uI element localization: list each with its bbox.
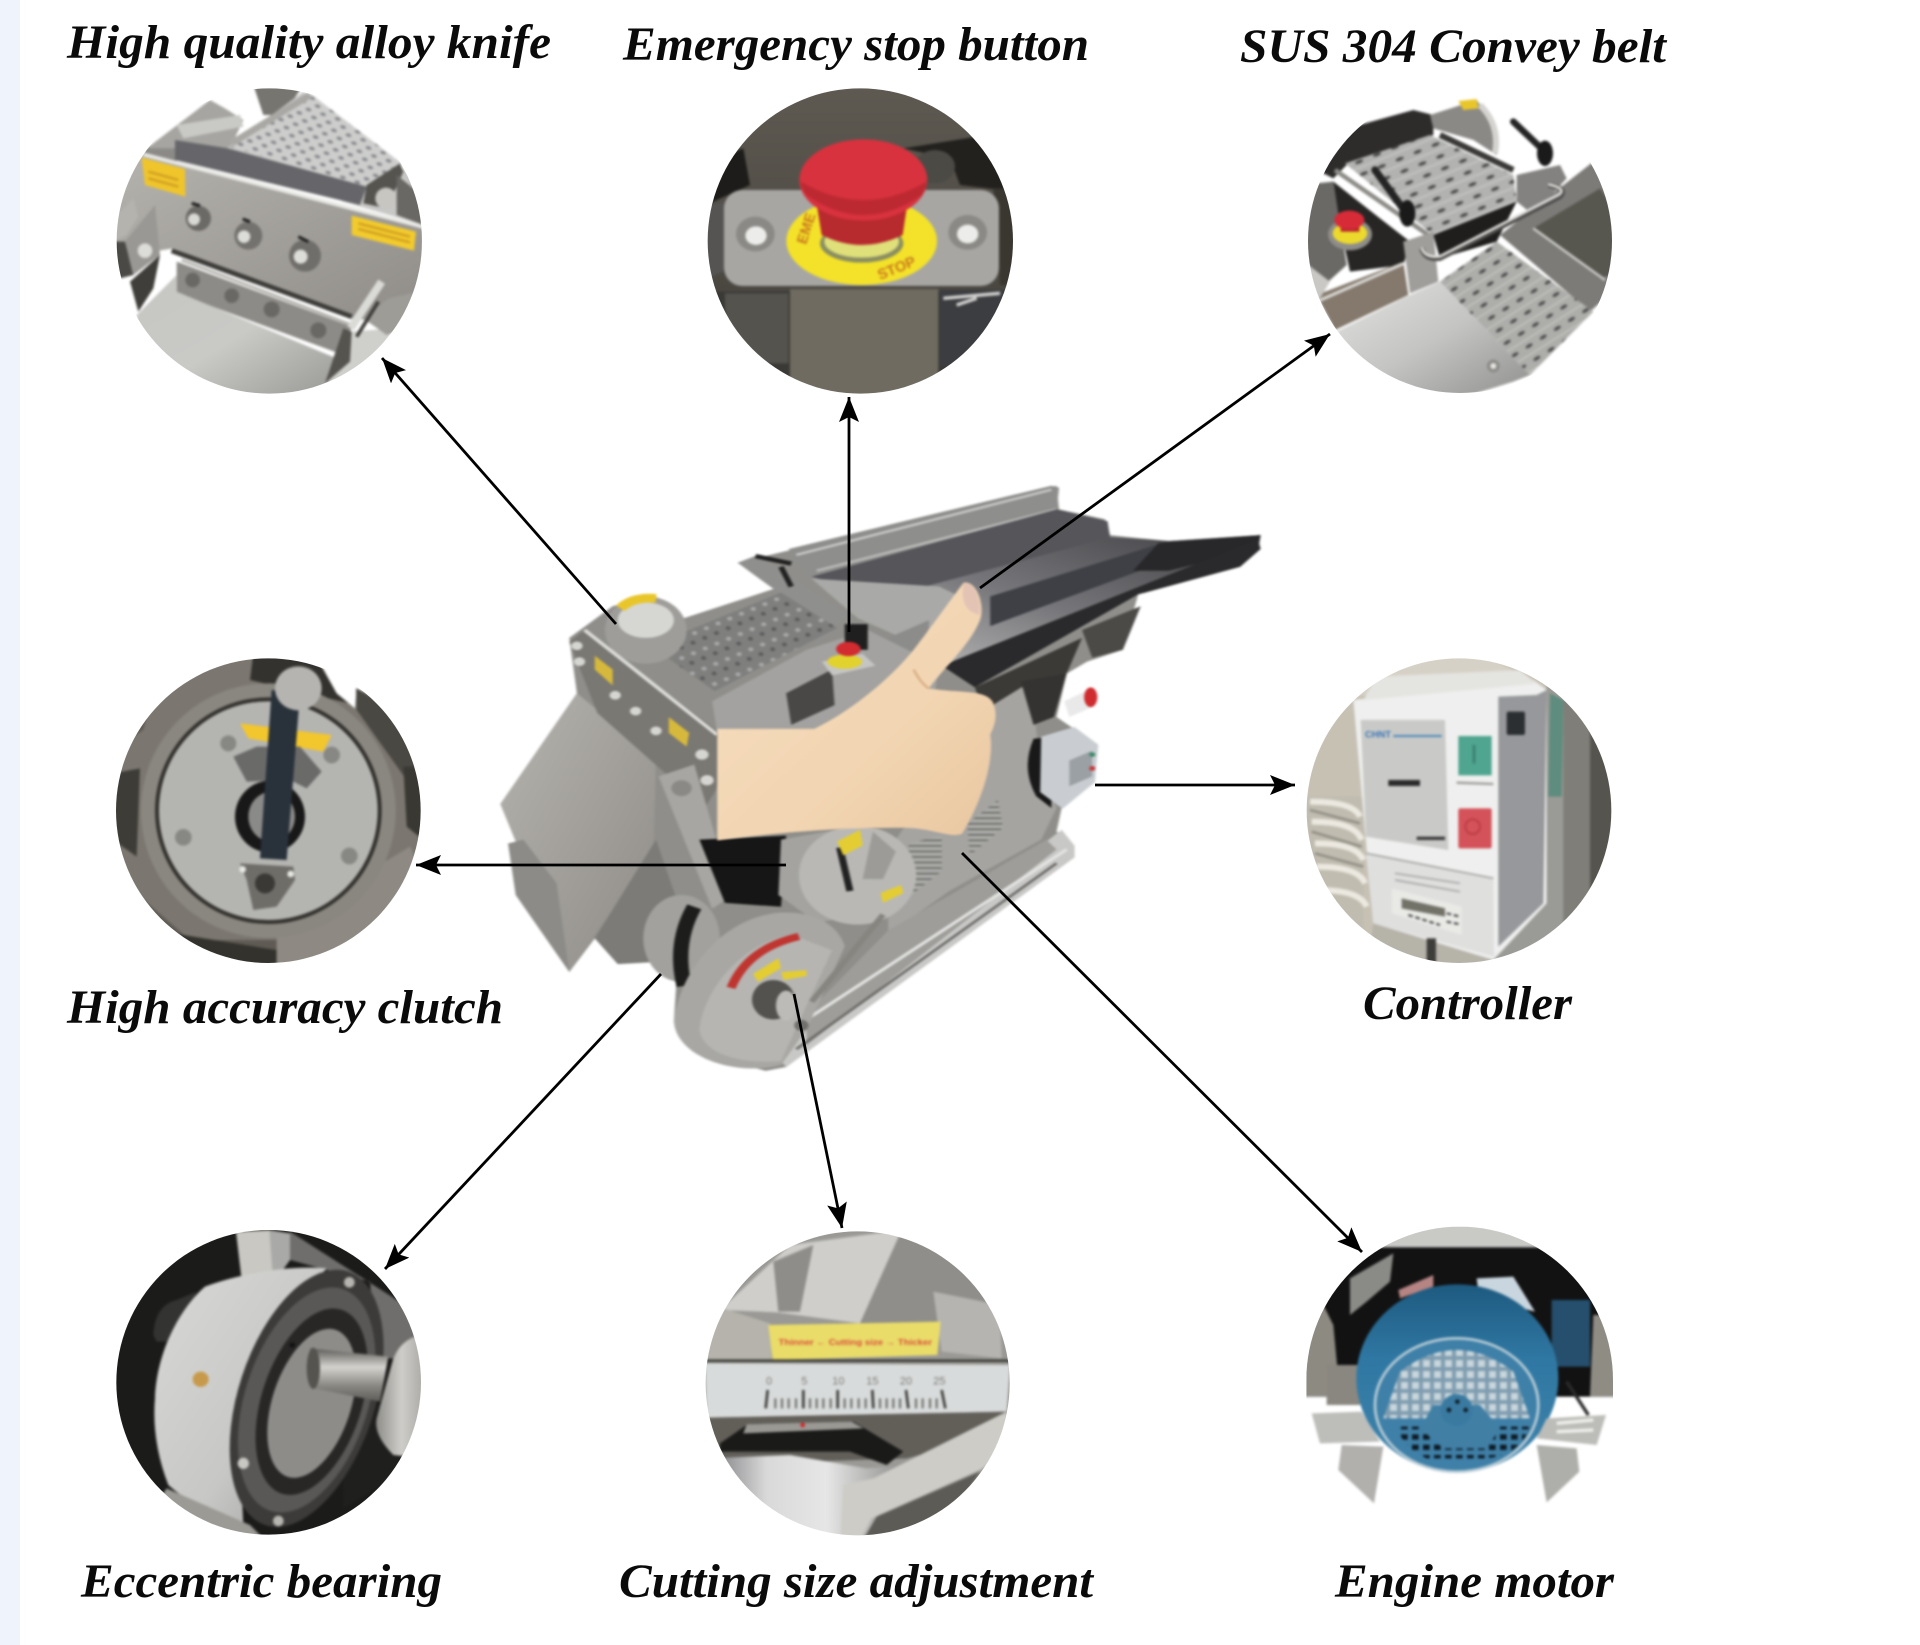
right tray xyxy=(1500,162,1620,312)
thumbs up hand xyxy=(717,582,996,840)
yellow warning labels xyxy=(142,158,185,197)
eccentric bearing drum xyxy=(643,895,720,982)
panel: conveyor belt photo circle xyxy=(1308,97,1612,393)
shaft collar xyxy=(376,1335,427,1458)
main body side xyxy=(888,681,1057,934)
arrow: to motor xyxy=(962,853,1362,1252)
dark gap xyxy=(1433,202,1517,258)
lower knife clamp and bolts xyxy=(177,262,352,355)
green start button xyxy=(1458,736,1492,775)
brass oil nipple xyxy=(193,1372,209,1387)
scale numbers: 15 xyxy=(866,1375,878,1387)
blue motor housing xyxy=(1356,1284,1558,1472)
steel side plate xyxy=(1498,690,1547,947)
panel: emergency stop photo circle xyxy=(700,85,1020,405)
angled lever arm xyxy=(840,1412,1012,1545)
center bearing xyxy=(235,781,305,853)
side link arm xyxy=(659,764,733,909)
plate screws xyxy=(736,217,775,251)
thumb nail xyxy=(963,583,980,615)
diagonal drive rod xyxy=(812,915,883,1002)
panel: cutting size scale photo circle xyxy=(700,1225,1020,1545)
arrow: to stop button xyxy=(848,397,850,632)
fan cover upper grid xyxy=(1383,1350,1530,1418)
feed belt xyxy=(651,592,837,691)
U shaped guard rod xyxy=(1422,185,1562,259)
scale numbers: 5 xyxy=(801,1375,807,1387)
button stem and silver ring xyxy=(818,234,905,264)
rating plate xyxy=(1477,1277,1535,1312)
lower outfeed tray xyxy=(888,535,1261,666)
scale numbers: 25 xyxy=(933,1375,945,1387)
scale numbers: 20 xyxy=(900,1375,912,1387)
arrow: to knife xyxy=(382,358,616,624)
knife side plate with bolts xyxy=(569,630,720,808)
output shaft xyxy=(310,1348,388,1402)
fan cover xyxy=(1375,1338,1538,1472)
silver drum xyxy=(154,1268,327,1525)
title: Eccentric bearing: Eccentric bearing xyxy=(80,1555,442,1608)
lower bracket xyxy=(716,292,942,372)
cutter housing xyxy=(712,630,939,733)
side vents xyxy=(1307,797,1363,953)
black handles xyxy=(1375,170,1410,218)
emergency stop on machine xyxy=(822,654,875,675)
yellow labels on pulley xyxy=(753,958,781,982)
left mounting bracket xyxy=(1312,1412,1380,1443)
large pulley guard xyxy=(674,913,845,1068)
arrow: to bearing xyxy=(385,974,661,1269)
adjusting bolts xyxy=(186,206,211,231)
base plate xyxy=(773,830,1074,1067)
gauge housing xyxy=(1430,100,1497,155)
lower dark frame xyxy=(707,1412,1010,1465)
title: Emergency stop button: Emergency stop button xyxy=(622,18,1089,71)
power plug xyxy=(1064,689,1097,717)
clutch drum xyxy=(778,830,909,923)
scale numbers: 10 xyxy=(832,1375,844,1387)
adjusting hub xyxy=(752,980,795,1019)
gauge drum xyxy=(605,596,687,664)
fan cover lower grid xyxy=(1397,1427,1530,1458)
aluminium face disk xyxy=(159,701,378,920)
yellow direction label xyxy=(768,1322,941,1360)
arrow: to cutting size xyxy=(794,994,842,1228)
panel: emergency stop photo circle: EME xyxy=(795,211,820,246)
red mushroom button xyxy=(799,139,927,221)
lever arm xyxy=(260,690,300,860)
side bracket xyxy=(125,205,160,275)
white enclosure xyxy=(1353,680,1547,960)
controller box xyxy=(1028,737,1051,808)
lever knob xyxy=(275,666,322,710)
panel: engine motor photo xyxy=(1300,1215,1620,1503)
scale major ticks xyxy=(766,1390,945,1408)
panel: controller photo circle: CHNT xyxy=(1365,729,1391,739)
steel plate xyxy=(724,190,999,286)
bearing flange xyxy=(200,1250,413,1546)
icon on side plate xyxy=(1507,712,1525,735)
white notch xyxy=(320,668,368,710)
arrow: to controller xyxy=(1095,784,1295,786)
scale minor ticks xyxy=(775,1398,937,1408)
panel: clutch photo circle xyxy=(116,658,421,963)
red arc label xyxy=(731,936,799,988)
panel: cutting size scale photo circle: Thinner ← Cutting size → Thicker xyxy=(779,1337,933,1347)
discharge flap xyxy=(500,693,656,972)
yellow scale label xyxy=(240,723,332,752)
title: High quality alloy knife: High quality alloy knife xyxy=(66,16,551,69)
rear clamp and handles xyxy=(738,555,847,646)
panel: controller photo circle xyxy=(1306,658,1612,963)
panel: eccentric bearing photo circle xyxy=(110,1225,430,1546)
lower cover xyxy=(1366,853,1494,957)
front rail xyxy=(1317,262,1408,330)
panel: emergency stop photo circle: STOP xyxy=(876,254,918,284)
support column xyxy=(1021,674,1067,725)
outer clutch ring xyxy=(141,683,396,938)
red stop button xyxy=(1458,808,1492,848)
title: Controller: Controller xyxy=(1363,977,1573,1030)
window and scale xyxy=(1392,888,1462,935)
label panel xyxy=(1361,720,1448,850)
right mounting bracket xyxy=(1537,1415,1606,1445)
terminal box xyxy=(1552,1300,1590,1367)
machine silhouette xyxy=(500,486,1261,1071)
bracket post xyxy=(236,1230,273,1280)
discharge chute xyxy=(137,275,337,398)
title: High accuracy clutch: High accuracy clutch xyxy=(66,981,503,1034)
scale numbers xyxy=(766,1375,945,1387)
gauge scale xyxy=(233,747,322,788)
upper belt xyxy=(1345,135,1517,235)
bottom steel sheet xyxy=(1337,282,1530,398)
panel: alloy knife photo circle xyxy=(110,85,430,405)
lower belt xyxy=(1440,242,1593,375)
title: Cutting size adjustment: Cutting size adjustment xyxy=(619,1555,1095,1608)
screws xyxy=(220,735,236,751)
upper infeed tray xyxy=(789,486,1059,577)
title: Engine motor: Engine motor xyxy=(1334,1555,1615,1608)
conveyor belt mesh xyxy=(230,93,402,188)
scale numbers: 0 xyxy=(766,1375,772,1387)
title: SUS 304 Convey belt: SUS 304 Convey belt xyxy=(1240,20,1668,73)
arrow: to clutch xyxy=(416,864,786,866)
outfeed side rail xyxy=(942,539,1261,687)
fan hub xyxy=(1441,1394,1473,1426)
arrow: to convey belt xyxy=(980,334,1330,588)
small stop button xyxy=(1328,218,1372,250)
yellow label xyxy=(786,197,937,285)
aluminium scale bar xyxy=(705,1363,1010,1418)
steel knife plate xyxy=(110,153,423,325)
left browser strip xyxy=(0,0,20,1645)
silver lower cylinder xyxy=(707,1455,907,1545)
central machine illustration xyxy=(500,486,1261,1071)
